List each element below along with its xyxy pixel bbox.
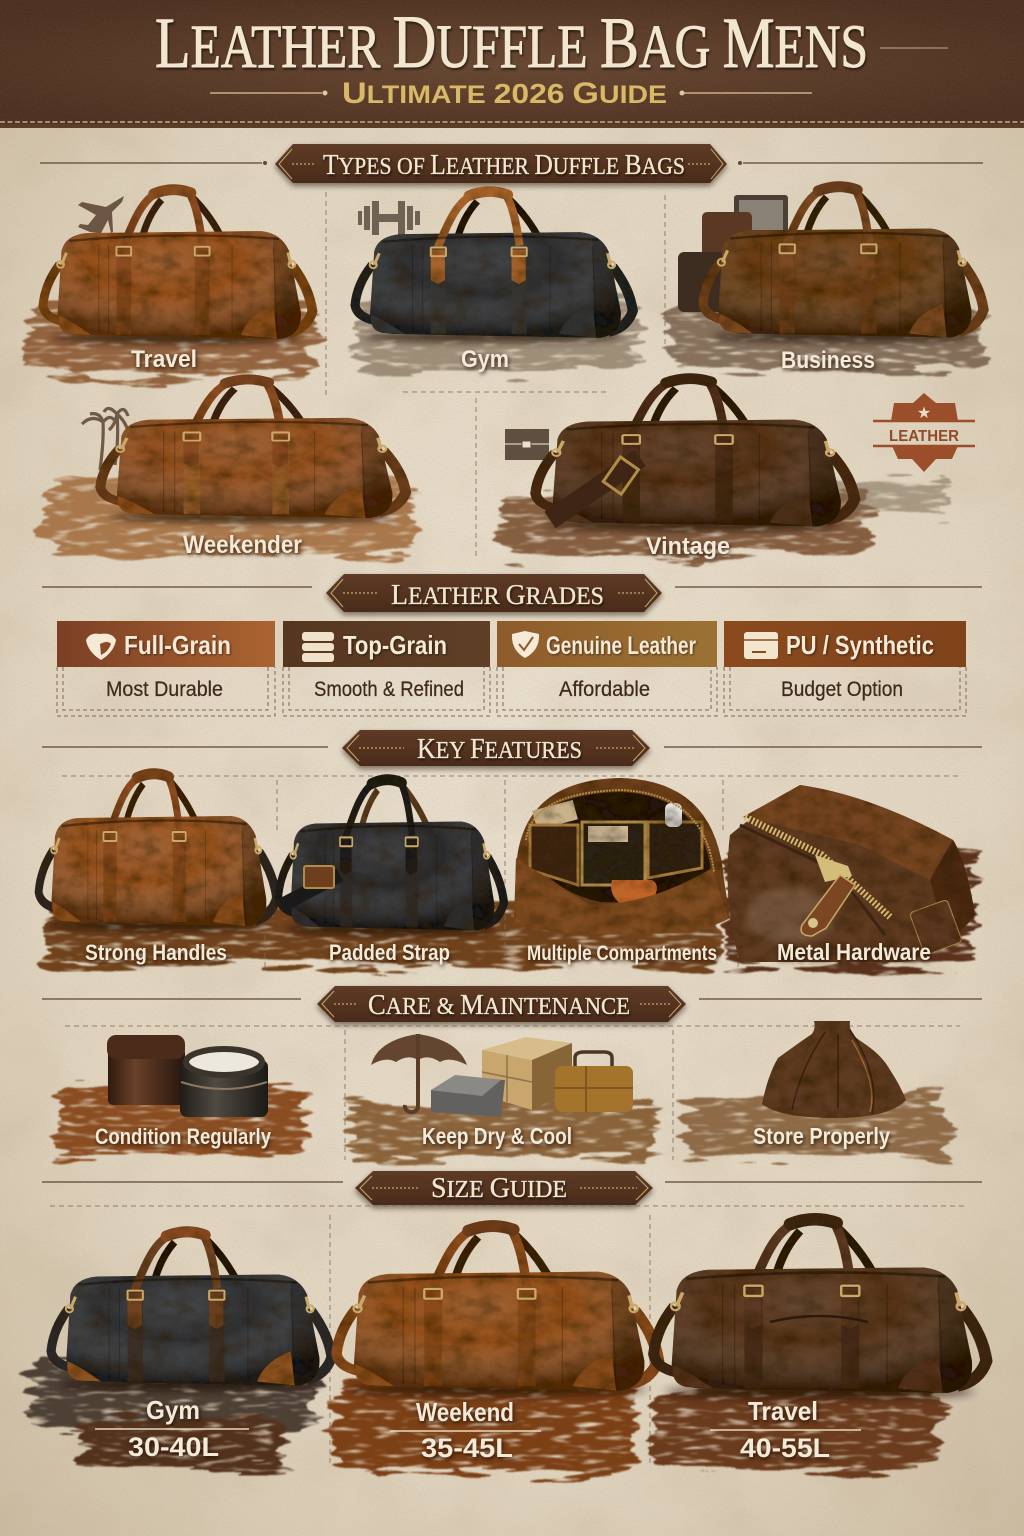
strap detail bbox=[282, 866, 340, 905]
section heading: size guide bbox=[42, 1171, 982, 1205]
panel: vintage bbox=[500, 378, 950, 560]
size dividers bbox=[50, 1206, 965, 1465]
panel: size gym bbox=[30, 1231, 332, 1470]
panel: pu synthetic bbox=[724, 621, 966, 716]
panel: travel bbox=[30, 189, 315, 377]
panel: genuine leather: Affordable bbox=[559, 678, 650, 701]
section heading: key features bbox=[42, 730, 982, 766]
front pocket flap bbox=[770, 1316, 868, 1322]
section heading: care bbox=[42, 986, 982, 1022]
panel: size travel: 40-55L bbox=[740, 1433, 830, 1463]
feature: padded strap bbox=[278, 779, 504, 965]
feature swash and dividers bbox=[40, 776, 975, 968]
subtitle: ULTIMATE 2026 GUIDE bbox=[342, 77, 667, 110]
icon: umbrella bbox=[371, 1034, 467, 1112]
panel: size travel: Travel bbox=[748, 1396, 818, 1426]
icon: leather badge: LEATHER bbox=[889, 428, 959, 445]
panel: weekender: Weekender bbox=[183, 531, 302, 559]
icon: small suitcase bbox=[555, 1052, 633, 1112]
icon: storage boxes bbox=[431, 1037, 572, 1117]
feature: strong handles bbox=[39, 773, 276, 965]
header band bbox=[0, 0, 1024, 128]
icon: wallet bbox=[505, 429, 549, 460]
panel: full-grain: Most Durable bbox=[106, 678, 223, 701]
panel: size gym: Gym bbox=[146, 1395, 200, 1425]
panel: size weekend: Weekend bbox=[416, 1397, 514, 1427]
panel: keep dry and cool bbox=[350, 1034, 660, 1156]
panel: vintage: Vintage bbox=[646, 533, 730, 560]
panel: condition regularly bbox=[55, 1035, 305, 1155]
panel: size weekend bbox=[335, 1225, 658, 1472]
icon: card bbox=[744, 632, 778, 659]
feature: metal hardware: Metal Hardware bbox=[777, 939, 931, 965]
panel: top-grain bbox=[283, 621, 490, 716]
panel: pu synthetic: Budget Option bbox=[781, 678, 903, 701]
panel: full-grain: Full-Grain bbox=[124, 630, 231, 660]
panel: store properly bbox=[685, 1021, 950, 1155]
icon: briefcase and tablet stack bbox=[678, 195, 788, 312]
panel: keep dry and cool: Keep Dry & Cool bbox=[422, 1123, 572, 1149]
icon: dumbbell bbox=[358, 201, 420, 235]
panel: genuine leather: Genuine Leather bbox=[546, 632, 696, 660]
panel: top-grain: Smooth & Refined bbox=[314, 678, 464, 701]
panel: full-grain bbox=[57, 621, 275, 716]
section heading: types: TYPES OF LEATHER DUFFLE BAGS bbox=[323, 150, 685, 181]
panel: store properly: Store Properly bbox=[753, 1123, 890, 1149]
section heading: leather grades bbox=[42, 574, 982, 612]
section heading: care: CARE & MAINTENANCE bbox=[368, 990, 630, 1021]
icon: layers bbox=[302, 632, 334, 662]
panel: weekender bbox=[45, 379, 415, 559]
panel: business bbox=[670, 186, 985, 374]
feature: metal hardware bbox=[728, 785, 975, 965]
panel: condition regularly: Condition Regularly bbox=[95, 1124, 272, 1149]
icon: palm trees bbox=[82, 408, 128, 470]
section heading: leather grades: LEATHER GRADES bbox=[391, 579, 604, 611]
panel: size gym: 30-40L bbox=[128, 1432, 219, 1462]
icon: leather badge bbox=[873, 393, 975, 472]
icon: conditioner jars bbox=[107, 1035, 268, 1117]
section heading: key features: KEY FEATURES bbox=[417, 734, 582, 765]
icon: leather badge: ★ bbox=[917, 403, 931, 422]
panel: pu synthetic: PU / Synthetic bbox=[786, 630, 934, 660]
feature: padded strap: Padded Strap bbox=[329, 940, 450, 965]
icon: hide bbox=[86, 634, 116, 660]
feature: multiple compartments: Multiple Compartments bbox=[527, 942, 717, 965]
icon: check shield bbox=[512, 631, 539, 658]
section heading: types bbox=[40, 144, 983, 183]
care dividers bbox=[65, 1026, 960, 1160]
feature: multiple compartments bbox=[514, 778, 730, 965]
title: LEATHER DUFFLE BAG MENS bbox=[155, 1, 868, 84]
icon: dust bag bbox=[762, 1021, 906, 1118]
shoulder strap and buckle bbox=[550, 457, 640, 520]
panel: gym bbox=[355, 191, 640, 373]
dividers bbox=[326, 192, 665, 560]
panel: gym: Gym bbox=[461, 346, 509, 373]
panel: travel: Travel bbox=[131, 346, 197, 373]
section heading: size guide: SIZE GUIDE bbox=[431, 1173, 567, 1204]
panel: size weekend: 35-45L bbox=[421, 1433, 513, 1463]
panel: genuine leather bbox=[497, 621, 717, 716]
subtitle bbox=[210, 77, 812, 110]
panel: size travel bbox=[654, 1218, 986, 1470]
panel: top-grain: Top-Grain bbox=[343, 630, 447, 660]
feature: strong handles: Strong Handles bbox=[85, 940, 227, 965]
panel: business: Business bbox=[781, 347, 875, 374]
icon: plane bbox=[78, 196, 124, 235]
